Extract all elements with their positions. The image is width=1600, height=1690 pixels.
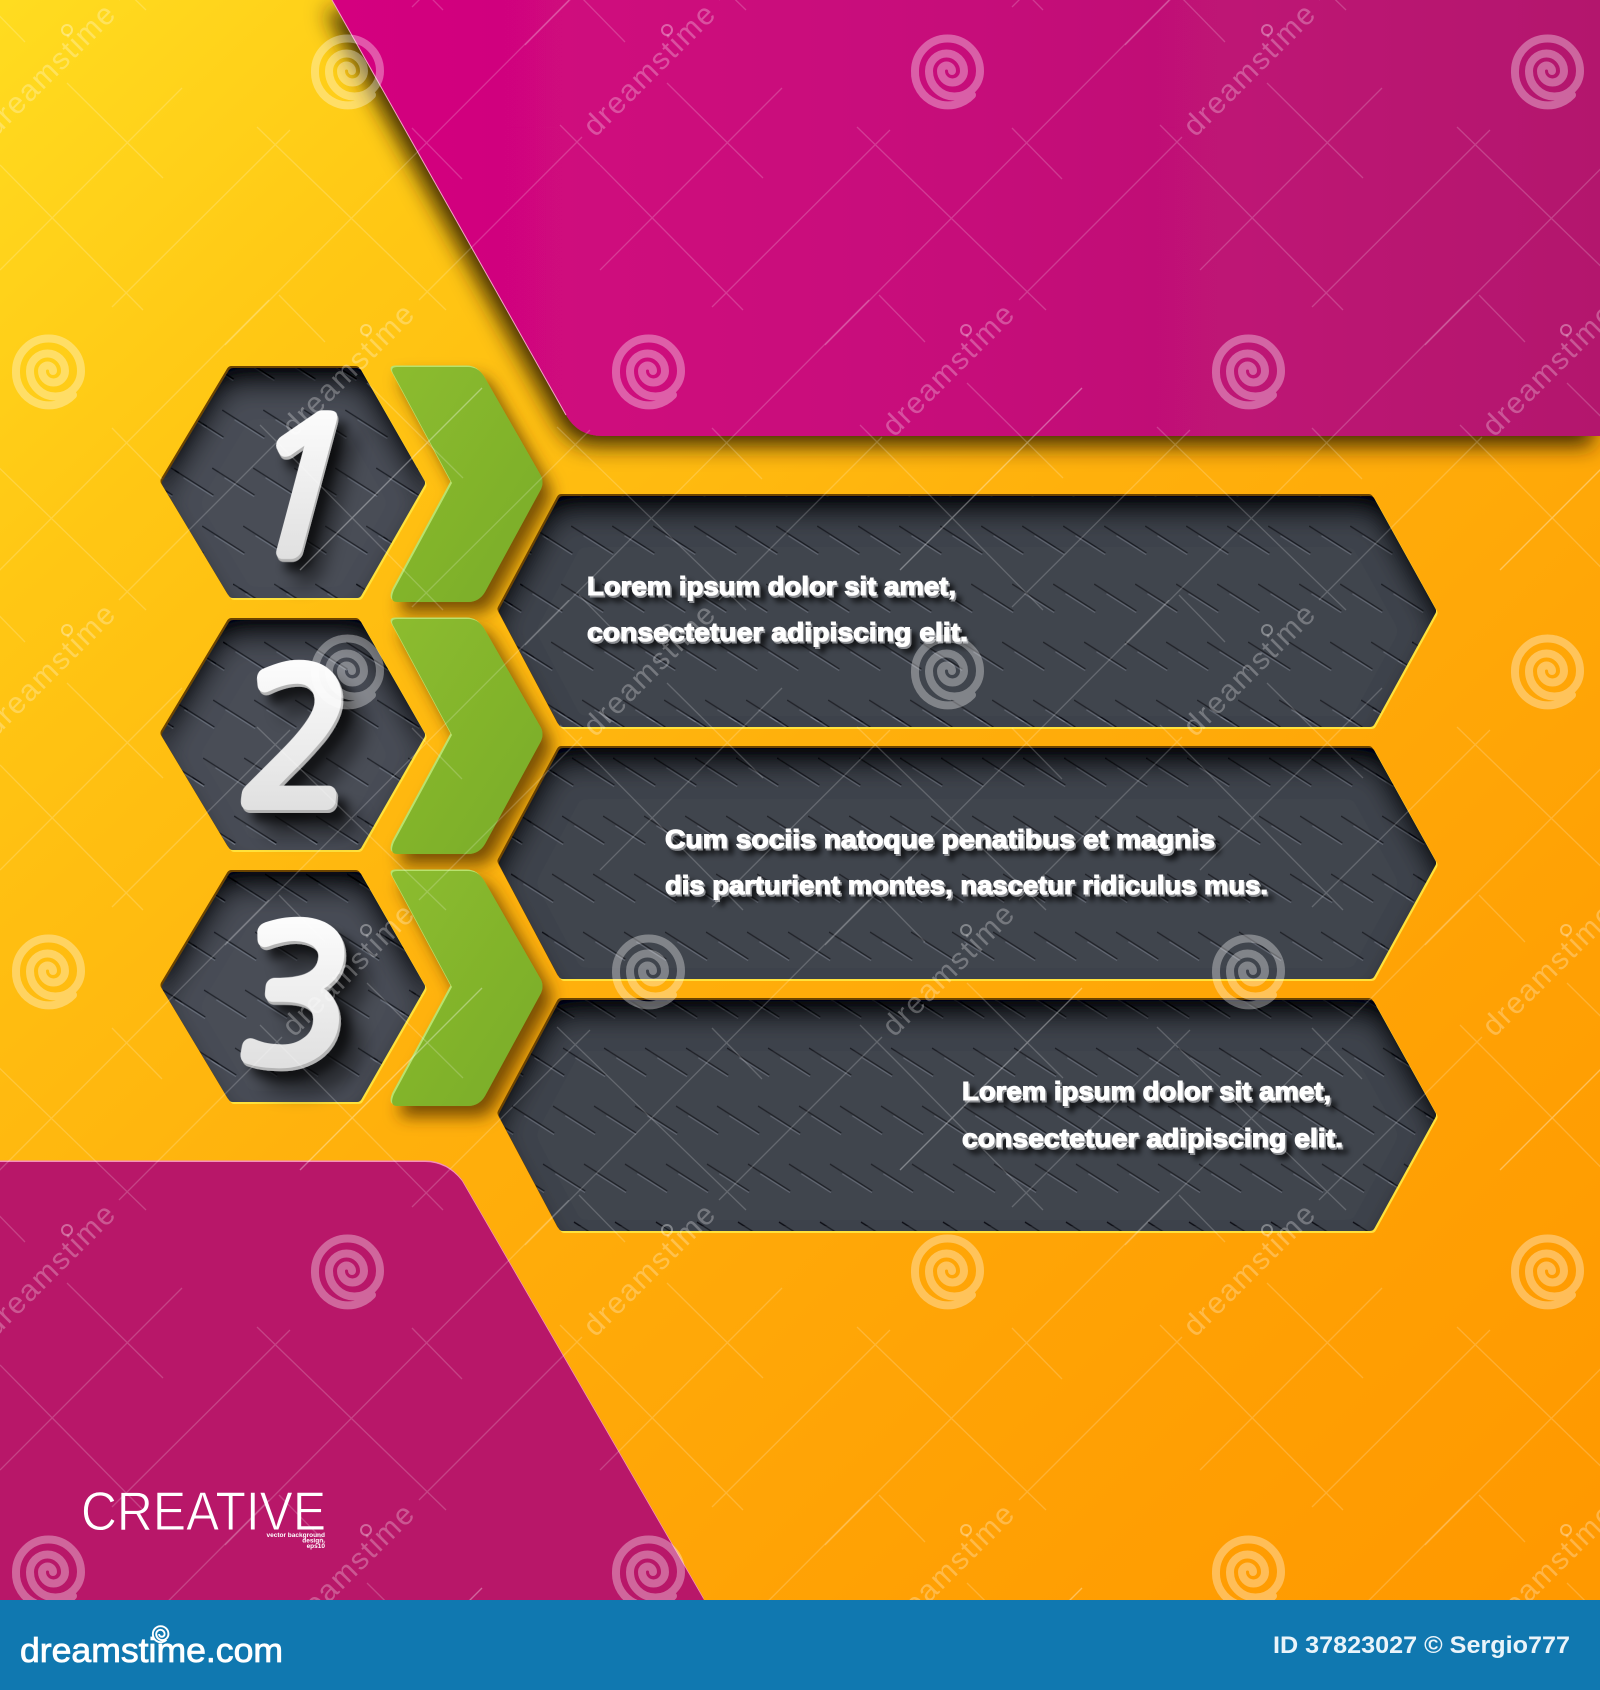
panel: dark bar 3 with text — [502, 1003, 1432, 1228]
footer logo text: dreamstime.com — [20, 1632, 283, 1670]
hexagon 3 with number — [166, 875, 422, 1099]
watermark overlay: spirals, diagonal text and crossing lines: dreamstime — [577, 598, 722, 743]
arrow: green chevron 3 — [391, 870, 542, 1106]
panel: dark bar 1 with text — [502, 499, 1432, 724]
icon: small spiral — [153, 1626, 168, 1642]
text block 1: consectetuer adipiscing elit. — [587, 617, 968, 647]
text block 1: Lorem ipsum dolor sit amet, — [587, 571, 956, 601]
number 3: 3 — [232, 905, 359, 1087]
hexagon 2 with number — [166, 623, 422, 847]
number 1: 1 — [221, 396, 380, 579]
watermark overlay: spirals, diagonal text and crossing lines: dreamstime — [276, 1498, 421, 1643]
watermark overlay: spirals, diagonal text and crossing lines: dreamstime — [876, 1498, 1021, 1643]
watermark overlay: spirals, diagonal text and crossing lines: dreamstime — [577, 1198, 722, 1343]
text block 3: consectetuer adipiscing elit. — [962, 1123, 1343, 1153]
watermark overlay: spirals, diagonal text and crossing lines: dreamstime — [1177, 598, 1322, 743]
text block 2: Cum sociis natoque penatibus et magnis — [665, 824, 1215, 854]
arrow: green chevron 1 — [391, 366, 542, 602]
logo: CREATIVE heading with tagline: vector background — [266, 1532, 325, 1539]
text block 1 — [587, 571, 968, 647]
text block 3 — [962, 1076, 1343, 1153]
watermark overlay: spirals, diagonal text and crossing lines: dreamstime — [577, 0, 722, 143]
logo: CREATIVE heading with tagline: design, — [302, 1538, 325, 1544]
number 2: 2 — [233, 648, 360, 830]
text block 3: Lorem ipsum dolor sit amet, — [962, 1076, 1331, 1106]
text block 2: dis parturient montes, nascetur ridiculus mus. — [665, 870, 1268, 900]
image id and credit: ID 37823027 © Sergio777 — [1273, 1632, 1570, 1659]
panel: top magenta shape — [332, 0, 1600, 436]
arrow: green chevron 2 — [391, 618, 542, 854]
text block 2 — [665, 824, 1268, 900]
hexagon 1 with number — [166, 371, 422, 595]
panel: bottom-left magenta shape — [0, 1160, 704, 1600]
logo: CREATIVE heading with tagline: CREATIVE — [81, 1480, 326, 1542]
watermark overlay: spirals, diagonal text and crossing lines: dreamstime — [276, 298, 421, 443]
watermark overlay: spirals, diagonal text and crossing lines: dreamstime — [1177, 1198, 1322, 1343]
logo: CREATIVE heading with tagline: eps10 — [307, 1543, 325, 1550]
watermark overlay: spirals, diagonal text and crossing lines: dreamstime — [876, 898, 1021, 1043]
watermark overlay: spirals, diagonal text and crossing lines: dreamstime — [876, 298, 1021, 443]
footer band — [0, 1600, 1600, 1690]
watermark overlay: spirals, diagonal text and crossing lines: dreamstime — [276, 898, 421, 1043]
watermark overlay: spirals, diagonal text and crossing lines: dreamstime — [1177, 0, 1322, 143]
panel: dark bar 2 with text — [502, 751, 1432, 976]
